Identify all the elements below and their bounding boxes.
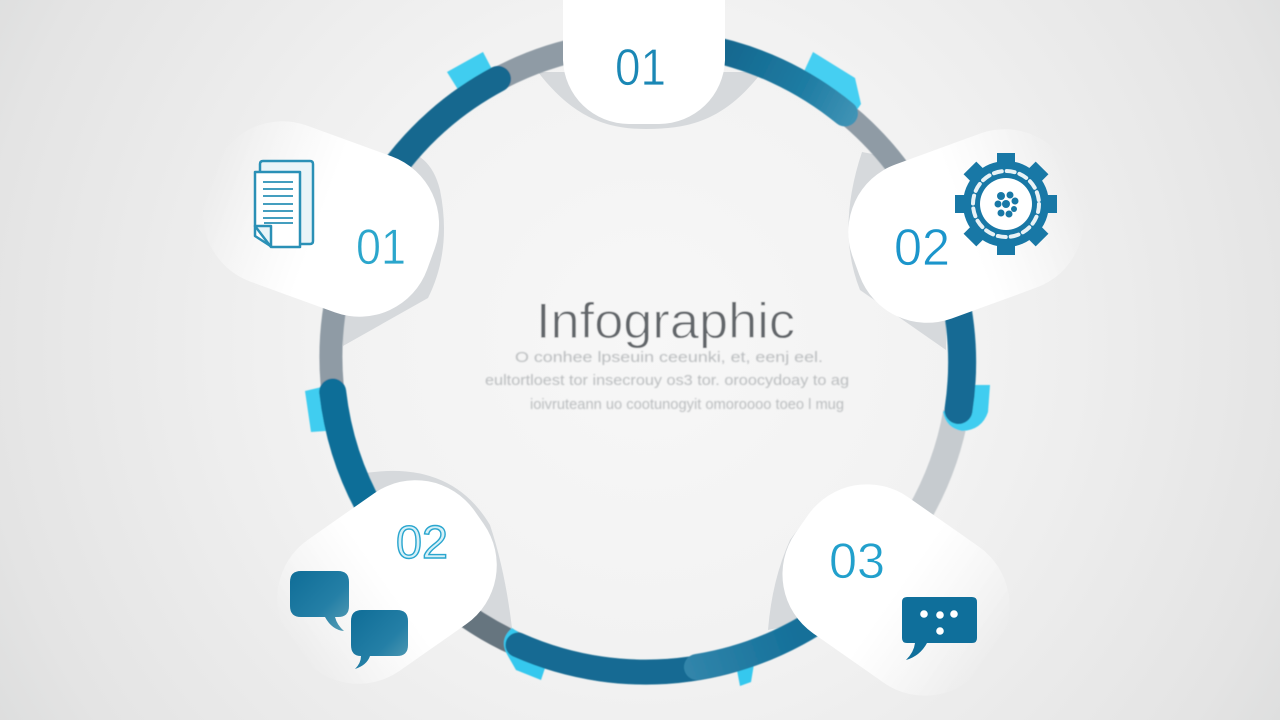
number: bottom right 03: 03: [829, 533, 885, 589]
ring segment: right lower light gray: [919, 412, 956, 514]
tab: top left: [447, 52, 495, 96]
card: bottom left: [249, 452, 525, 712]
tab: left: [305, 386, 340, 432]
number: top 01: 01: [615, 39, 666, 97]
ring segment: top-right gray: [840, 109, 919, 200]
body text: ioivruteann uo cootunogyit omoroooo toeo l mug: [530, 396, 844, 413]
ring segment: bottom dark: [518, 598, 848, 672]
ring segment: left gray: [331, 276, 342, 401]
ring segment: top-right dark: [701, 47, 845, 113]
card: right: [828, 109, 1104, 343]
tab: top right: [800, 52, 861, 120]
icon: chat with dots: [902, 597, 977, 660]
ring: [305, 47, 990, 686]
tab: bottom left: [504, 628, 546, 680]
icon: speech bubbles: [290, 571, 408, 669]
number: right 02: 02: [894, 219, 950, 277]
card: top: [563, 0, 725, 124]
title: Infographic: [536, 293, 795, 349]
body text: [485, 349, 849, 413]
body text: O conhee lpseuin ceeunki, et, eenj eel.: [515, 349, 823, 366]
ring segment: bottom lighter overlay: [697, 598, 848, 667]
ring segment: top-left gray: [488, 47, 591, 84]
ring segment: top-left dark: [388, 79, 498, 176]
tab: right: [943, 385, 990, 431]
number: left 01: 01: [356, 219, 406, 275]
icon: gear: [955, 153, 1057, 255]
tab: bottom right: [736, 664, 754, 686]
card: bottom right: [754, 456, 1038, 720]
ring segment: left dark: [333, 392, 373, 514]
icon: documents: [255, 161, 313, 247]
card shadows: [340, 72, 946, 630]
ring segment: bottom-left dark gray: [452, 605, 528, 649]
ring segment: right dark: [954, 292, 962, 410]
number: bottom left 02: 02: [396, 516, 448, 568]
body text: eultortloest tor insecrouy os3 tor. oroocydoay to ag: [485, 372, 849, 389]
card: left: [183, 101, 459, 337]
